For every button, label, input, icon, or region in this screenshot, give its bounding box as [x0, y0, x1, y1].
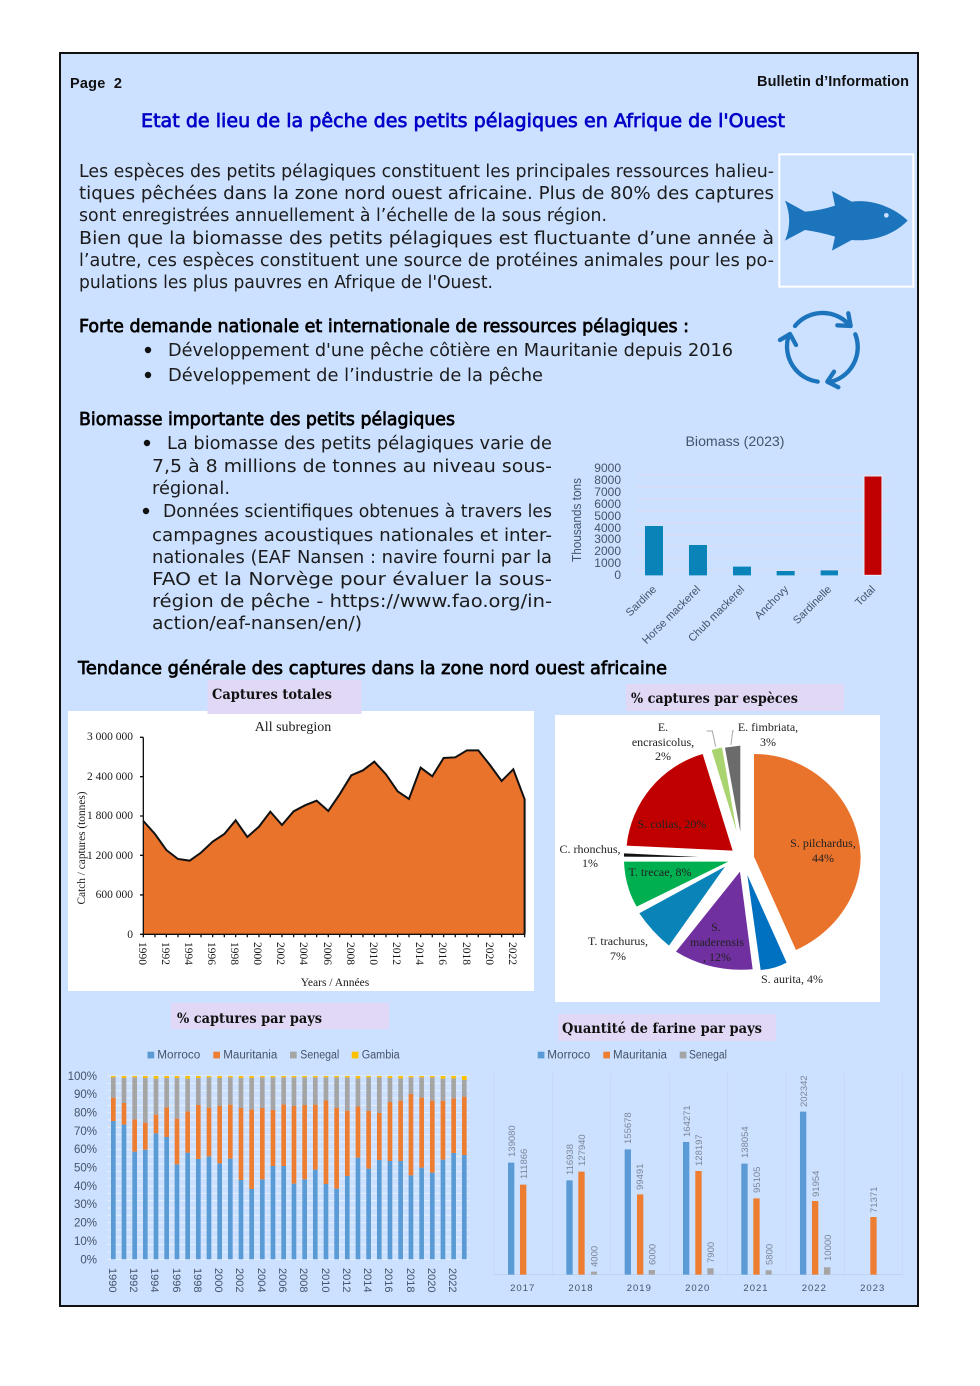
heading: forte demande: Forte demande nationale et internationale de ressources pélagiques : — [79, 317, 689, 337]
bar chart: quantité de farine par pays: 2018 — [568, 1283, 594, 1294]
panel: area chart captures totales: 2004 — [297, 942, 309, 965]
bullet list: biomasse: FAO et la Norvège pour évaluer la sous- — [152, 570, 552, 590]
stacked bar chart: captures par pays: 1990 — [106, 1268, 118, 1292]
panel: pie chart captures par espèces: maderensis — [690, 935, 744, 949]
panel: area chart captures totales: 2008 — [344, 942, 356, 965]
panel: area chart captures totales: 2014 — [413, 942, 425, 965]
stacked bar chart: captures par pays: 1996 — [170, 1268, 182, 1292]
bar chart: quantité de farine par pays — [494, 1050, 903, 1294]
stacked bar chart: captures par pays: 100% — [68, 1071, 97, 1083]
icon: fish — [779, 154, 913, 287]
bullet list: demande — [145, 341, 733, 386]
page panel — [60, 53, 918, 1306]
stacked bar chart: captures par pays: 40% — [74, 1181, 97, 1193]
intro text block: tiques pêchées dans la zone nord ouest africaine. Plus de 80% des captures — [79, 184, 774, 204]
panel: pie chart captures par espèces: 7% — [610, 949, 626, 963]
panel: area chart captures totales: All subregion — [255, 720, 331, 735]
bullet list: biomasse: Données scientifiques obtenues à travers les — [163, 502, 552, 522]
panel: pie chart captures par espèces: S. pilchardus, — [790, 836, 856, 850]
bar chart: quantité de farine par pays: 2019 — [627, 1283, 652, 1294]
stacked bar chart: captures par pays: Morroco — [157, 1050, 200, 1062]
bar chart: quantité de farine par pays: 2023 — [860, 1283, 885, 1294]
bullet list: biomasse: régional. — [152, 479, 230, 499]
bar chart: biomass 2023: 7000 — [594, 485, 621, 499]
panel: area chart captures totales: 2018 — [460, 942, 472, 965]
stacked bar chart: captures par pays: 2006 — [276, 1268, 288, 1292]
bar chart: biomass 2023: 8000 — [594, 473, 621, 487]
bullet list: demande: Développement de l’industrie de la pêche — [168, 366, 543, 386]
stacked bar chart: captures par pays: 1992 — [127, 1268, 139, 1292]
stacked bar chart: captures par pays: 2020 — [425, 1268, 437, 1292]
panel: area chart captures totales: 2006 — [321, 942, 333, 965]
panel: pie chart captures par espèces: 44% — [812, 851, 834, 865]
bar chart: quantité de farine par pays: 127940 — [577, 1134, 588, 1166]
bar chart: quantité de farine par pays: 202342 — [799, 1075, 810, 1107]
bar chart: quantité de farine par pays: 95105 — [752, 1167, 763, 1193]
stacked bar chart: captures par pays: 2002 — [233, 1268, 245, 1292]
panel: area chart captures totales: 2012 — [390, 942, 402, 965]
bar chart: biomass 2023: Total — [853, 584, 878, 609]
panel: area chart captures totales: 2 400 000 — [87, 771, 133, 783]
stacked bar chart: captures par pays: 30% — [74, 1199, 97, 1211]
intro text block: Bien que la biomasse des petits pélagiques est fluctuante d’une année à — [79, 229, 774, 249]
intro text block: pulations les plus pauvres en Afrique de l'Ouest. — [79, 273, 493, 293]
stacked bar chart: captures par pays: 2008 — [297, 1268, 309, 1292]
bar chart: quantité de farine par pays: 2022 — [802, 1283, 827, 1294]
bar chart: biomass 2023 — [570, 433, 890, 647]
bar chart: quantité de farine par pays: Senegal — [689, 1050, 727, 1062]
bar chart: biomass 2023: Horse mackerel — [640, 584, 703, 647]
bar chart: biomass 2023: 1000 — [594, 556, 621, 570]
bulletin label: Bulletin d’Information — [757, 74, 909, 90]
bar chart: quantité de farine par pays: 6000 — [648, 1244, 658, 1265]
heading: captures par espèces: % captures par espèces — [631, 691, 798, 707]
panel: area chart captures totales: 1 200 000 — [87, 850, 133, 862]
stacked bar chart: captures par pays: 2010 — [319, 1268, 331, 1292]
stacked bar chart: captures par pays: 60% — [74, 1144, 97, 1156]
page number: Page 2 — [70, 76, 122, 92]
panel: area chart captures totales: 1996 — [205, 942, 217, 965]
bar chart: biomass 2023: 9000 — [594, 461, 621, 475]
stacked bar chart: captures par pays: 2018 — [404, 1268, 416, 1292]
bullet list: biomasse — [143, 434, 552, 634]
panel: pie chart captures par espèces: T. trachurus, — [588, 934, 648, 948]
panel: pie chart captures par espèces: 3% — [760, 735, 776, 749]
title: Etat de lieu de la pêche des petits pélagiques en Afrique de l'Ouest — [141, 110, 785, 132]
stacked bar chart: captures par pays: 2022 — [446, 1268, 458, 1292]
stacked bar chart: captures par pays: Gambia — [362, 1050, 400, 1062]
bar chart: quantité de farine par pays: 155678 — [623, 1112, 634, 1144]
bar chart: biomass 2023: Anchovy — [753, 583, 791, 622]
stacked bar chart: captures par pays: 2014 — [361, 1268, 373, 1292]
bar chart: biomass 2023: Chub mackerel — [686, 584, 747, 644]
bar chart: quantité de farine par pays: 128197 — [694, 1134, 705, 1166]
panel: area chart captures totales: 3 000 000 — [87, 731, 133, 743]
panel: area chart captures totales: 2022 — [506, 942, 518, 965]
stacked bar chart: captures par pays: 2016 — [382, 1268, 394, 1292]
panel: area chart captures totales: 1998 — [228, 942, 240, 965]
stacked bar chart: captures par pays: 50% — [74, 1162, 97, 1174]
intro text block: Les espèces des petits pélagiques constituent les principales ressources halieu- — [79, 162, 774, 182]
panel: pie chart captures par espèces: S. colias, 20% — [638, 817, 706, 831]
panel: area chart captures totales: Catch / captures (tonnes) — [74, 791, 88, 904]
bullet list: biomasse: La biomasse des petits pélagiques varie de — [167, 434, 552, 454]
stacked bar chart: captures par pays: 0% — [80, 1254, 97, 1266]
bar chart: quantité de farine par pays: 139080 — [507, 1125, 518, 1157]
bullet list: demande: Développement d'une pêche côtière en Mauritanie depuis 2016 — [168, 341, 733, 361]
panel: area chart captures totales: 1994 — [182, 942, 194, 965]
heading: captures totales — [208, 680, 362, 714]
bar chart: biomass 2023: Thousands tons — [570, 478, 584, 562]
panel: area chart captures totales: 1990 — [136, 942, 148, 965]
stacked bar chart: captures par pays: 70% — [74, 1126, 97, 1138]
bar chart: quantité de farine par pays: Morroco — [547, 1050, 590, 1062]
panel: area chart captures totales — [68, 711, 534, 991]
bullet list: biomasse: action/eaf-nansen/en/) — [152, 614, 362, 634]
bar chart: biomass 2023: Sardinelle — [791, 584, 834, 627]
panel: area chart captures totales: 2000 — [251, 942, 263, 965]
bar chart: biomass 2023: 0 — [614, 568, 621, 582]
icon: cycle arrows — [780, 313, 858, 387]
panel: pie chart captures par espèces: encrasicolus, — [632, 735, 694, 749]
bar chart: quantité de farine par pays: 71371 — [869, 1187, 880, 1213]
intro text block — [79, 162, 774, 293]
stacked bar chart: captures par pays: 10% — [74, 1236, 97, 1248]
panel: pie chart captures par espèces: E. — [658, 720, 668, 734]
panel: area chart captures totales: 1992 — [159, 942, 171, 965]
heading: captures par espèces — [626, 684, 844, 711]
stacked bar chart: captures par pays: 1994 — [148, 1268, 160, 1292]
panel: area chart captures totales: 0 — [127, 929, 133, 941]
bar chart: biomass 2023: 6000 — [594, 497, 621, 511]
bar chart: quantité de farine par pays: 5800 — [764, 1244, 776, 1265]
panel: pie chart captures par espèces: 2% — [655, 749, 671, 763]
panel: pie chart captures par espèces: S. — [711, 920, 721, 934]
heading: quantité de farine — [558, 1014, 776, 1041]
bullet list: biomasse: 7,5 à 8 millions de tonnes au niveau sous- — [152, 457, 552, 477]
panel: area chart captures totales: 600 000 — [96, 889, 133, 901]
intro text block: l’autre, ces espèces constituent une source de protéines animales pour les po- — [79, 251, 774, 271]
stacked bar chart: captures par pays: Senegal — [300, 1050, 339, 1062]
bar chart: quantité de farine par pays: 99491 — [635, 1164, 646, 1190]
bullet list: biomasse: région de pêche - https://www.fao.org/in- — [152, 592, 552, 612]
bar chart: quantité de farine par pays: 2020 — [685, 1283, 710, 1294]
bar chart: quantité de farine par pays: 2021 — [743, 1283, 769, 1294]
bar chart: quantité de farine par pays: 164271 — [682, 1105, 693, 1137]
stacked bar chart: captures par pays: 2012 — [340, 1268, 352, 1292]
bar chart: quantité de farine par pays: Mauritania — [613, 1050, 668, 1062]
bar chart: biomass 2023: 2000 — [594, 544, 621, 558]
heading: tendance: Tendance générale des captures dans la zone nord ouest africaine — [77, 659, 667, 679]
stacked bar chart: captures par pays: 80% — [74, 1108, 97, 1120]
panel: area chart captures totales: 2020 — [483, 942, 495, 965]
bullet list: biomasse: nationales (EAF Nansen : navire fourni par la — [152, 548, 552, 568]
panel: pie chart captures par espèces: , 12% — [703, 950, 731, 964]
stacked bar chart: captures par pays — [68, 1050, 469, 1292]
bar chart: quantité de farine par pays: 116938 — [565, 1144, 576, 1175]
stacked bar chart: captures par pays: 2004 — [255, 1268, 267, 1292]
stacked bar chart: captures par pays: 20% — [74, 1218, 97, 1230]
bullet list: biomasse: campagnes acoustiques nationales et inter- — [152, 526, 552, 546]
bar chart: biomass 2023: 5000 — [594, 509, 621, 523]
panel: pie chart captures par espèces: T. trecae, 8% — [628, 865, 692, 879]
bar chart: quantité de farine par pays: 4000 — [590, 1246, 600, 1267]
panel: area chart captures totales: 2002 — [274, 942, 286, 965]
heading: biomasse: Biomasse importante des petits pélagiques — [79, 410, 455, 430]
bar chart: quantité de farine par pays: 138054 — [740, 1126, 751, 1158]
panel: pie chart captures par espèces: 1% — [582, 856, 598, 870]
bar chart: biomass 2023: Biomass (2023) — [686, 433, 784, 449]
bar chart: biomass 2023: 3000 — [594, 532, 621, 546]
bar chart: biomass 2023: Sardine — [624, 584, 659, 619]
stacked bar chart: captures par pays: 90% — [74, 1089, 97, 1101]
bar chart: quantité de farine par pays: 111866 — [519, 1149, 530, 1179]
panel: area chart captures totales: Years / Années — [301, 977, 370, 989]
stacked bar chart: captures par pays: Mauritania — [223, 1050, 278, 1062]
panel: pie chart captures par espèces: S. aurita, 4% — [761, 972, 823, 986]
stacked bar chart: captures par pays: 2000 — [212, 1268, 224, 1292]
bar chart: biomass 2023: 4000 — [594, 521, 621, 535]
panel: pie chart captures par espèces: C. rhonchus, — [560, 842, 620, 856]
bar chart: quantité de farine par pays: 2017 — [510, 1283, 535, 1294]
panel: pie chart captures par espèces: E. fimbriata, — [738, 720, 798, 734]
bar chart: quantité de farine par pays: 91954 — [811, 1171, 822, 1197]
panel: area chart captures totales: 2010 — [367, 942, 379, 965]
intro text block: sont enregistrées annuellement à l’échelle de la sous région. — [79, 206, 607, 226]
panel: area chart captures totales: 1 800 000 — [87, 810, 133, 822]
heading: quantité de farine: Quantité de farine par pays — [562, 1021, 762, 1037]
bar chart: quantité de farine par pays: 10000 — [823, 1235, 834, 1261]
heading: captures totales: Captures totales — [212, 687, 332, 703]
bar chart: quantité de farine par pays: 7900 — [706, 1242, 717, 1263]
heading: captures par pays — [171, 1003, 389, 1029]
heading: captures par pays: % captures par pays — [177, 1011, 322, 1027]
panel: area chart captures totales: 2016 — [436, 942, 448, 965]
panel: pie chart captures par espèces — [555, 715, 880, 1002]
stacked bar chart: captures par pays: 1998 — [191, 1268, 203, 1292]
